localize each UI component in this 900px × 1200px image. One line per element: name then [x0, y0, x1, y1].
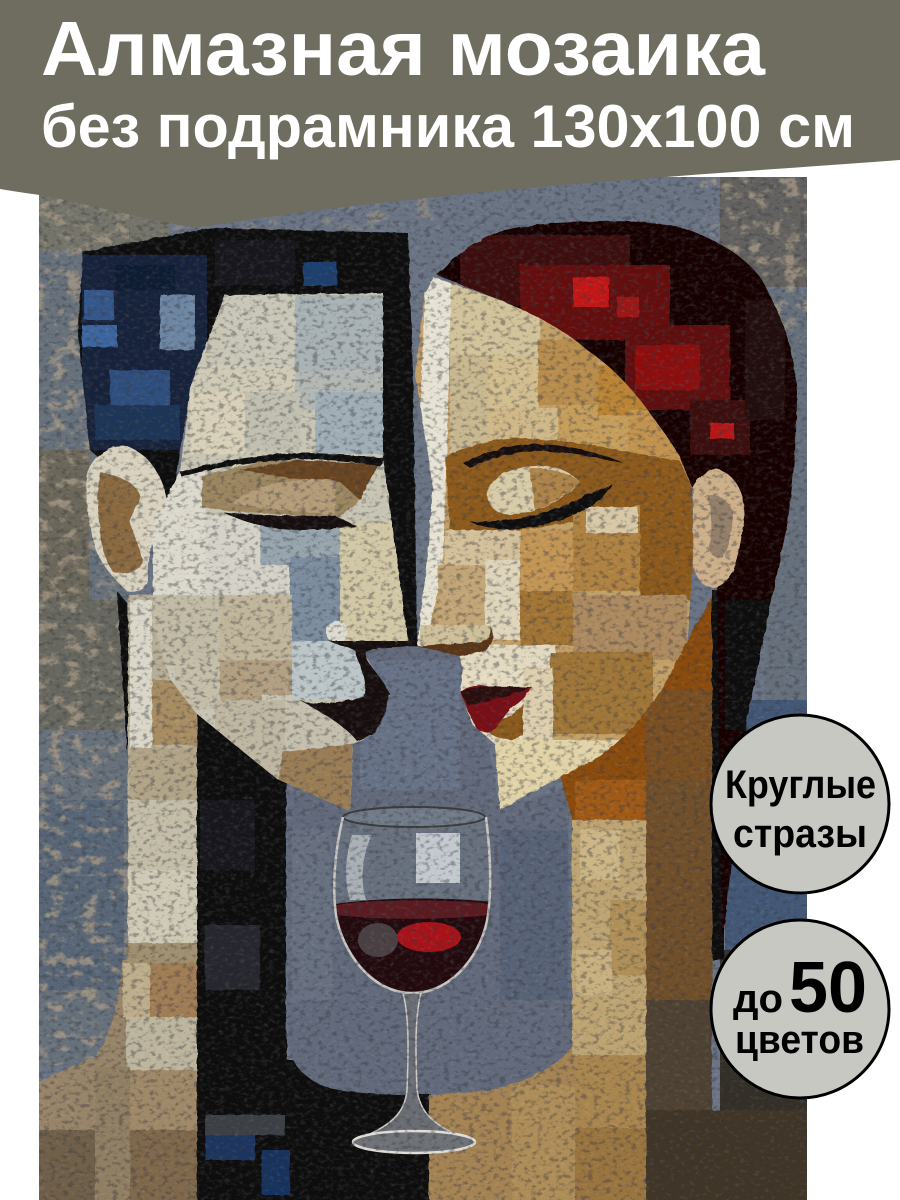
man's nose and lips [300, 621, 417, 741]
badge: up to 50 colours: цветов [735, 1018, 864, 1062]
forehead tiles [190, 295, 385, 454]
title: без подрамника 130х100 см [41, 93, 855, 160]
grey centre panel behind glass [286, 645, 572, 1095]
white strip [417, 277, 452, 647]
cheek tiles [150, 470, 410, 811]
badge: up to 50 colours [711, 920, 889, 1098]
painting texture [39, 177, 807, 1200]
woman's nose and lips [417, 626, 532, 733]
woman's ear [693, 469, 745, 587]
badge: up to 50 colours: до [733, 977, 783, 1021]
badge: round rhinestones: Круглые [725, 763, 876, 807]
man's hair [78, 228, 417, 641]
wine glass [330, 805, 495, 1153]
badge: round rhinestones: стразы [733, 812, 867, 856]
badge: up to 50 colours: 50 [789, 948, 867, 1028]
man's ear [86, 446, 170, 592]
man's face [145, 285, 420, 820]
woman's neck and body [429, 587, 811, 1200]
woman's brow and closed eye [463, 444, 623, 529]
header banner [0, 0, 900, 228]
man's eye band [180, 453, 385, 530]
woman's hair [437, 221, 797, 950]
forehead tiles [450, 285, 688, 470]
title: Алмазная мозаика [41, 6, 766, 92]
woman's face [410, 270, 700, 815]
title [41, 6, 855, 160]
eye socket [445, 438, 695, 600]
painting: couple with wine glass [39, 177, 811, 1200]
badge: round rhinestones [711, 715, 889, 893]
man's body and neck [39, 591, 430, 1200]
cheek tiles [420, 507, 687, 812]
painting background wall [39, 177, 807, 1200]
